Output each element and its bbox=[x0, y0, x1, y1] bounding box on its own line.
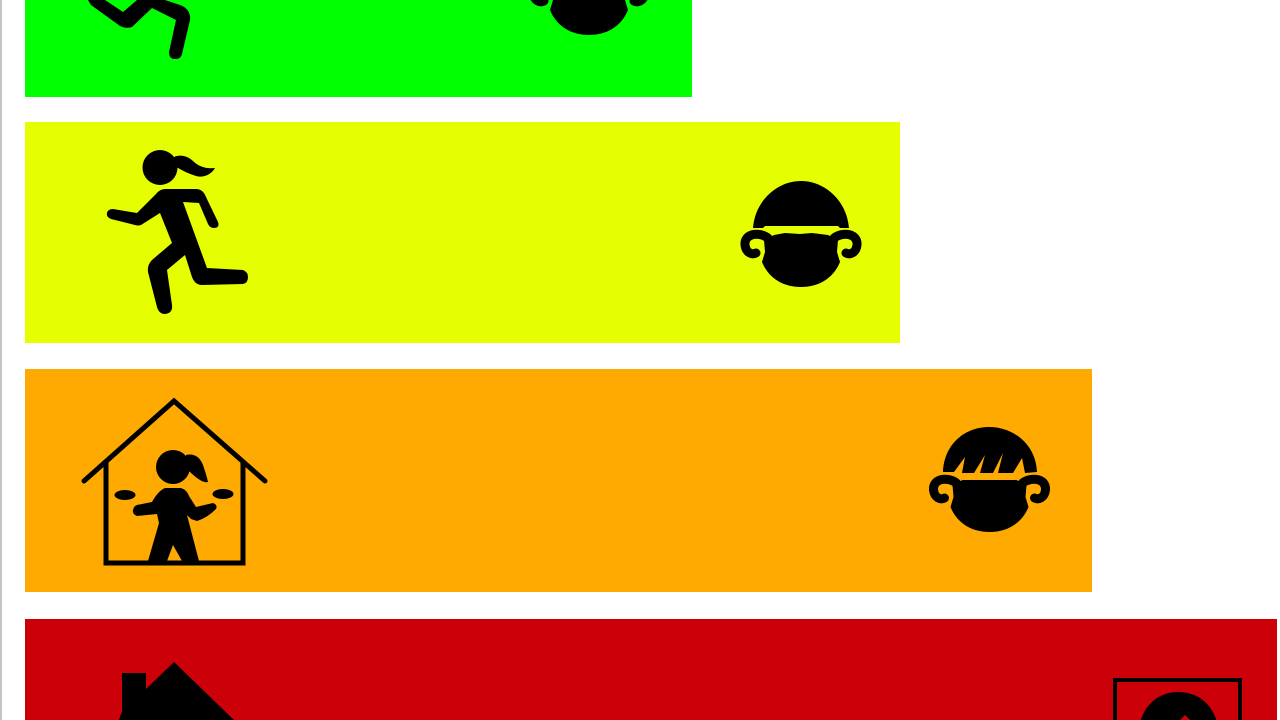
panel: yellow level bbox=[25, 122, 900, 343]
icon: house (cropped) bbox=[118, 662, 236, 720]
panel: green level bbox=[25, 0, 692, 97]
icon: woman playing at home bbox=[84, 401, 265, 563]
panel: orange level bbox=[25, 369, 1092, 592]
icon: face mask with hair bbox=[933, 427, 1046, 532]
icon: framed face (cropped) bbox=[1115, 680, 1240, 720]
icon: runner (cropped) bbox=[88, 0, 190, 59]
icon: face mask with cap bbox=[745, 181, 857, 287]
icon: face mask (cropped) bbox=[533, 0, 645, 35]
icon: running woman bbox=[107, 150, 248, 314]
panel: red level bbox=[25, 619, 1277, 720]
